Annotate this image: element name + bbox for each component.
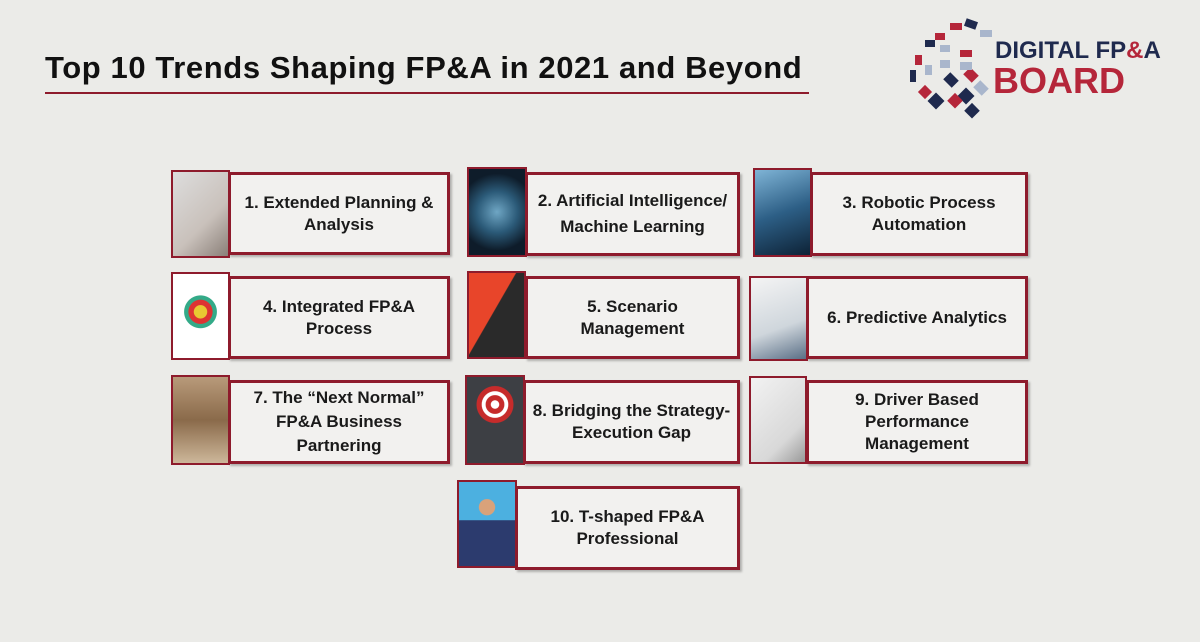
image 7 [171, 375, 230, 465]
card 9 [749, 376, 1031, 467]
image 5 [467, 271, 526, 359]
text 8: 8. Bridging the Strategy-Execution Gap [533, 401, 730, 442]
text 10: 10. T-shaped FP&A Professional [550, 507, 704, 548]
card 5 [467, 271, 743, 362]
card 2 [467, 167, 743, 259]
title: Top 10 Trends Shaping FP&A in 2021 and Beyond [45, 50, 802, 85]
image 4 [171, 272, 230, 360]
text 7: 7. The “Next Normal” FP&A Business Partnering [254, 388, 424, 455]
card 6 [749, 276, 1031, 362]
card 1 [171, 170, 453, 258]
text 7 [228, 380, 450, 464]
image 9 [749, 376, 807, 464]
image 2 [467, 167, 527, 257]
text 10 [515, 486, 740, 570]
card 10 [457, 480, 743, 573]
image 6 [749, 276, 808, 361]
logo: DIGITAL FP&A [995, 37, 1161, 64]
text 6: 6. Predictive Analytics [827, 308, 1007, 326]
image 3 [753, 168, 812, 257]
text 8 [523, 380, 740, 464]
card 3 [753, 168, 1031, 259]
text 1 [228, 172, 450, 255]
text 5 [525, 276, 740, 359]
card 7 [171, 375, 453, 467]
text 6 [806, 276, 1028, 359]
image 8 [465, 375, 525, 465]
text 4 [228, 276, 450, 359]
text 3 [810, 172, 1028, 256]
logo: BOARD [993, 60, 1125, 101]
text 9 [806, 380, 1028, 464]
card 4 [171, 272, 453, 362]
text 2 [525, 172, 740, 256]
text 9: 9. Driver Based Performance Management [855, 390, 979, 453]
image 1 [171, 170, 230, 258]
logo [910, 18, 1161, 118]
image 10 [457, 480, 517, 568]
text 1: 1. Extended Planning & Analysis [245, 192, 433, 234]
text 2: 2. Artificial Intelligence/ Machine Learning [538, 191, 727, 236]
text 5: 5. Scenario Management [581, 296, 684, 338]
text 3: 3. Robotic Process Automation [842, 193, 996, 234]
text 4: 4. Integrated FP&A Process [263, 296, 415, 338]
card 8 [465, 375, 743, 467]
